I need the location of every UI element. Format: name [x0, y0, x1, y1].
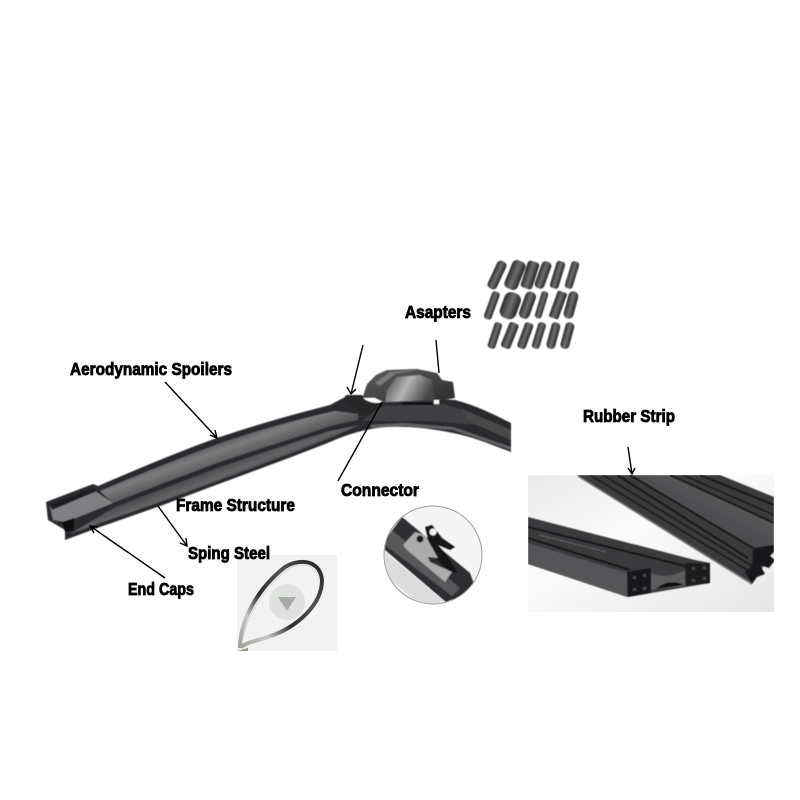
centre emblem — [269, 584, 305, 620]
adapters set — [483, 258, 580, 350]
connector — [343, 395, 383, 416]
rail — [385, 517, 480, 603]
arrow: frame structure to spring steel — [158, 506, 187, 546]
steel loop — [240, 562, 322, 648]
inset: connector close-up — [380, 506, 482, 610]
label: Asapters: Asapters — [405, 302, 471, 322]
lower strip — [528, 517, 710, 597]
photo background — [528, 475, 774, 612]
arrow: rubber strip — [628, 447, 635, 474]
label: Sping Steel: Sping Steel — [188, 543, 270, 563]
arrow: adapters — [436, 340, 439, 373]
arrow: left connector point — [347, 345, 363, 394]
row 2 — [483, 290, 579, 321]
strip end profile — [627, 568, 651, 597]
label: Aerodynamic Spoilers: Aerodynamic Spoilers — [70, 359, 232, 379]
lower band — [70, 425, 360, 534]
right side band — [362, 404, 477, 425]
label: End Caps: End Caps — [128, 579, 194, 599]
row 3 — [487, 321, 575, 350]
row 1 — [486, 258, 580, 292]
label: Frame Structure: Frame Structure — [176, 495, 295, 515]
spoiler face — [100, 411, 358, 503]
end cap — [50, 489, 113, 522]
hood — [363, 369, 455, 402]
dark clip — [425, 525, 458, 573]
blade body — [46, 396, 511, 540]
circle background — [384, 506, 482, 604]
inset: spring steel — [237, 555, 337, 651]
wiper blade — [46, 369, 511, 540]
arrow: end caps — [90, 526, 165, 578]
silver clip — [403, 532, 452, 582]
arrow: connector — [338, 402, 382, 481]
label: Connector: Connector — [341, 480, 419, 500]
inset background — [237, 555, 337, 651]
label: Rubber Strip: Rubber Strip — [583, 406, 675, 426]
inset: rubber strip — [528, 475, 775, 612]
arrows — [90, 340, 635, 578]
upper strip — [577, 475, 774, 583]
arrow: aerodynamic spoilers — [165, 382, 217, 438]
